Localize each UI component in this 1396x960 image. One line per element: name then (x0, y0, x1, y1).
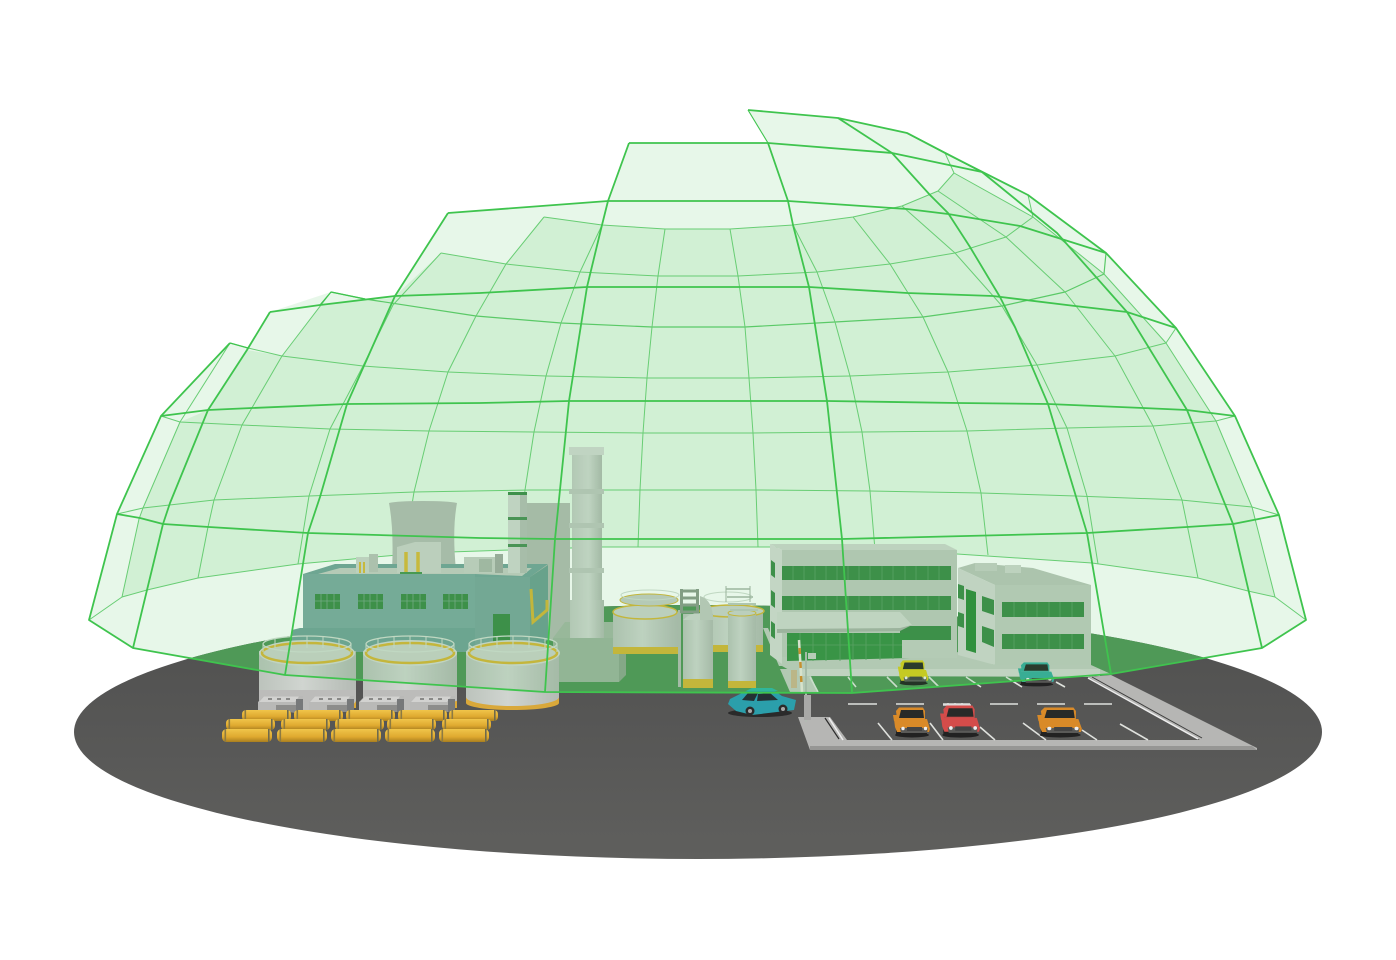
factory roof (303, 564, 548, 577)
mid process tanks (613, 586, 764, 688)
power block behind stack (527, 503, 570, 640)
dome: front shell (89, 110, 1306, 693)
illustration: industrial site under a green dome (74, 109, 1322, 859)
orange pickup right (1037, 708, 1082, 738)
storage tank 2 (363, 636, 457, 711)
sidewalk (800, 669, 1100, 676)
parking stripes and dashes (848, 704, 1148, 740)
rear right tank (700, 592, 764, 652)
factory front walls (303, 574, 475, 632)
entry gate and barrier (791, 640, 816, 722)
red pickup (940, 703, 980, 738)
ground floor glazing (787, 633, 910, 661)
office plaza (763, 628, 1111, 692)
dome: rear shell (89, 153, 1306, 620)
office upper right glass (900, 626, 951, 641)
storage tank 3 (466, 636, 560, 710)
factory door (493, 614, 510, 648)
tall cylinder left (678, 589, 713, 688)
air handling units (258, 696, 455, 712)
thin chimney (508, 492, 527, 573)
entrance canopy (777, 612, 912, 632)
second office windows (958, 584, 1084, 653)
cooling tower (389, 501, 457, 570)
green ground inside dome (192, 605, 1204, 692)
tall cylinder right (726, 586, 758, 688)
factory main building (292, 492, 548, 652)
factory windows (315, 594, 468, 609)
office window bands (771, 560, 951, 639)
tall exhaust stack (569, 447, 604, 640)
parking lot curb (798, 675, 1257, 750)
stack base platform (553, 600, 626, 682)
ground disc (74, 605, 1322, 859)
blue sedan (728, 688, 796, 717)
yellow side pipe (531, 589, 547, 622)
rear left tank (613, 590, 679, 654)
teal pickup (1018, 662, 1054, 686)
second office building (958, 563, 1091, 665)
roof units (356, 542, 503, 574)
orange pickup (893, 708, 930, 738)
yellow gas cylinders (222, 710, 498, 742)
main office building (770, 544, 957, 664)
parking stripes upper row (810, 677, 1065, 692)
storage tank 1 (259, 636, 356, 713)
yellow pickup (898, 660, 929, 685)
